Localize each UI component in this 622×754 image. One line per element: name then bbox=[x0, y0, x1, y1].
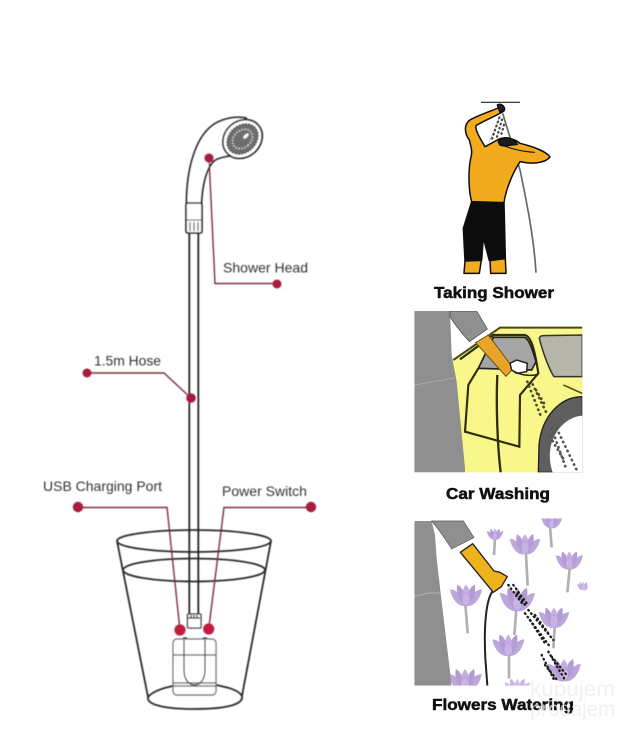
callout: USB charging port: USB Charging Port bbox=[43, 479, 162, 494]
panel: car washing bbox=[414, 311, 582, 472]
car body bbox=[453, 328, 582, 472]
callout: hose bbox=[82, 354, 196, 403]
panel: flowers watering bbox=[414, 515, 590, 696]
hose bbox=[485, 591, 493, 686]
water spray bbox=[527, 382, 577, 470]
watermark bbox=[530, 678, 615, 721]
callout: hose: 1.5m Hose bbox=[94, 354, 161, 368]
callout: shower head: Shower Head bbox=[223, 260, 308, 276]
label: taking shower: Taking Shower bbox=[434, 285, 554, 302]
callout: power switch: Power Switch bbox=[222, 484, 307, 499]
callout: shower head bbox=[204, 153, 308, 288]
shower handle bbox=[476, 335, 538, 376]
watermark: kupujem bbox=[530, 678, 615, 701]
main product diagram bbox=[43, 112, 316, 709]
hose connector bbox=[183, 614, 207, 638]
person bbox=[414, 311, 487, 472]
pump bottle bbox=[173, 639, 216, 695]
shower head bbox=[186, 112, 270, 233]
callout: USB charging port bbox=[43, 479, 186, 636]
shower head collar bbox=[186, 203, 202, 233]
person bbox=[414, 521, 451, 686]
flower stems bbox=[465, 527, 570, 678]
watermark: prodajem bbox=[530, 698, 615, 721]
man figure bbox=[463, 104, 550, 273]
flowers bbox=[448, 515, 590, 696]
panel: taking shower bbox=[463, 102, 550, 273]
label: flowers watering: Flowers Watering bbox=[432, 697, 574, 714]
hose bbox=[189, 233, 198, 615]
bucket of water bbox=[117, 530, 271, 709]
car wheel bbox=[538, 397, 582, 472]
label: car washing: Car Washing bbox=[446, 486, 550, 503]
shower hose and spray bbox=[481, 102, 536, 273]
water spray bbox=[508, 585, 567, 682]
sleeve bbox=[432, 521, 474, 549]
callout: power switch bbox=[203, 484, 316, 635]
shower handle bbox=[460, 544, 507, 592]
